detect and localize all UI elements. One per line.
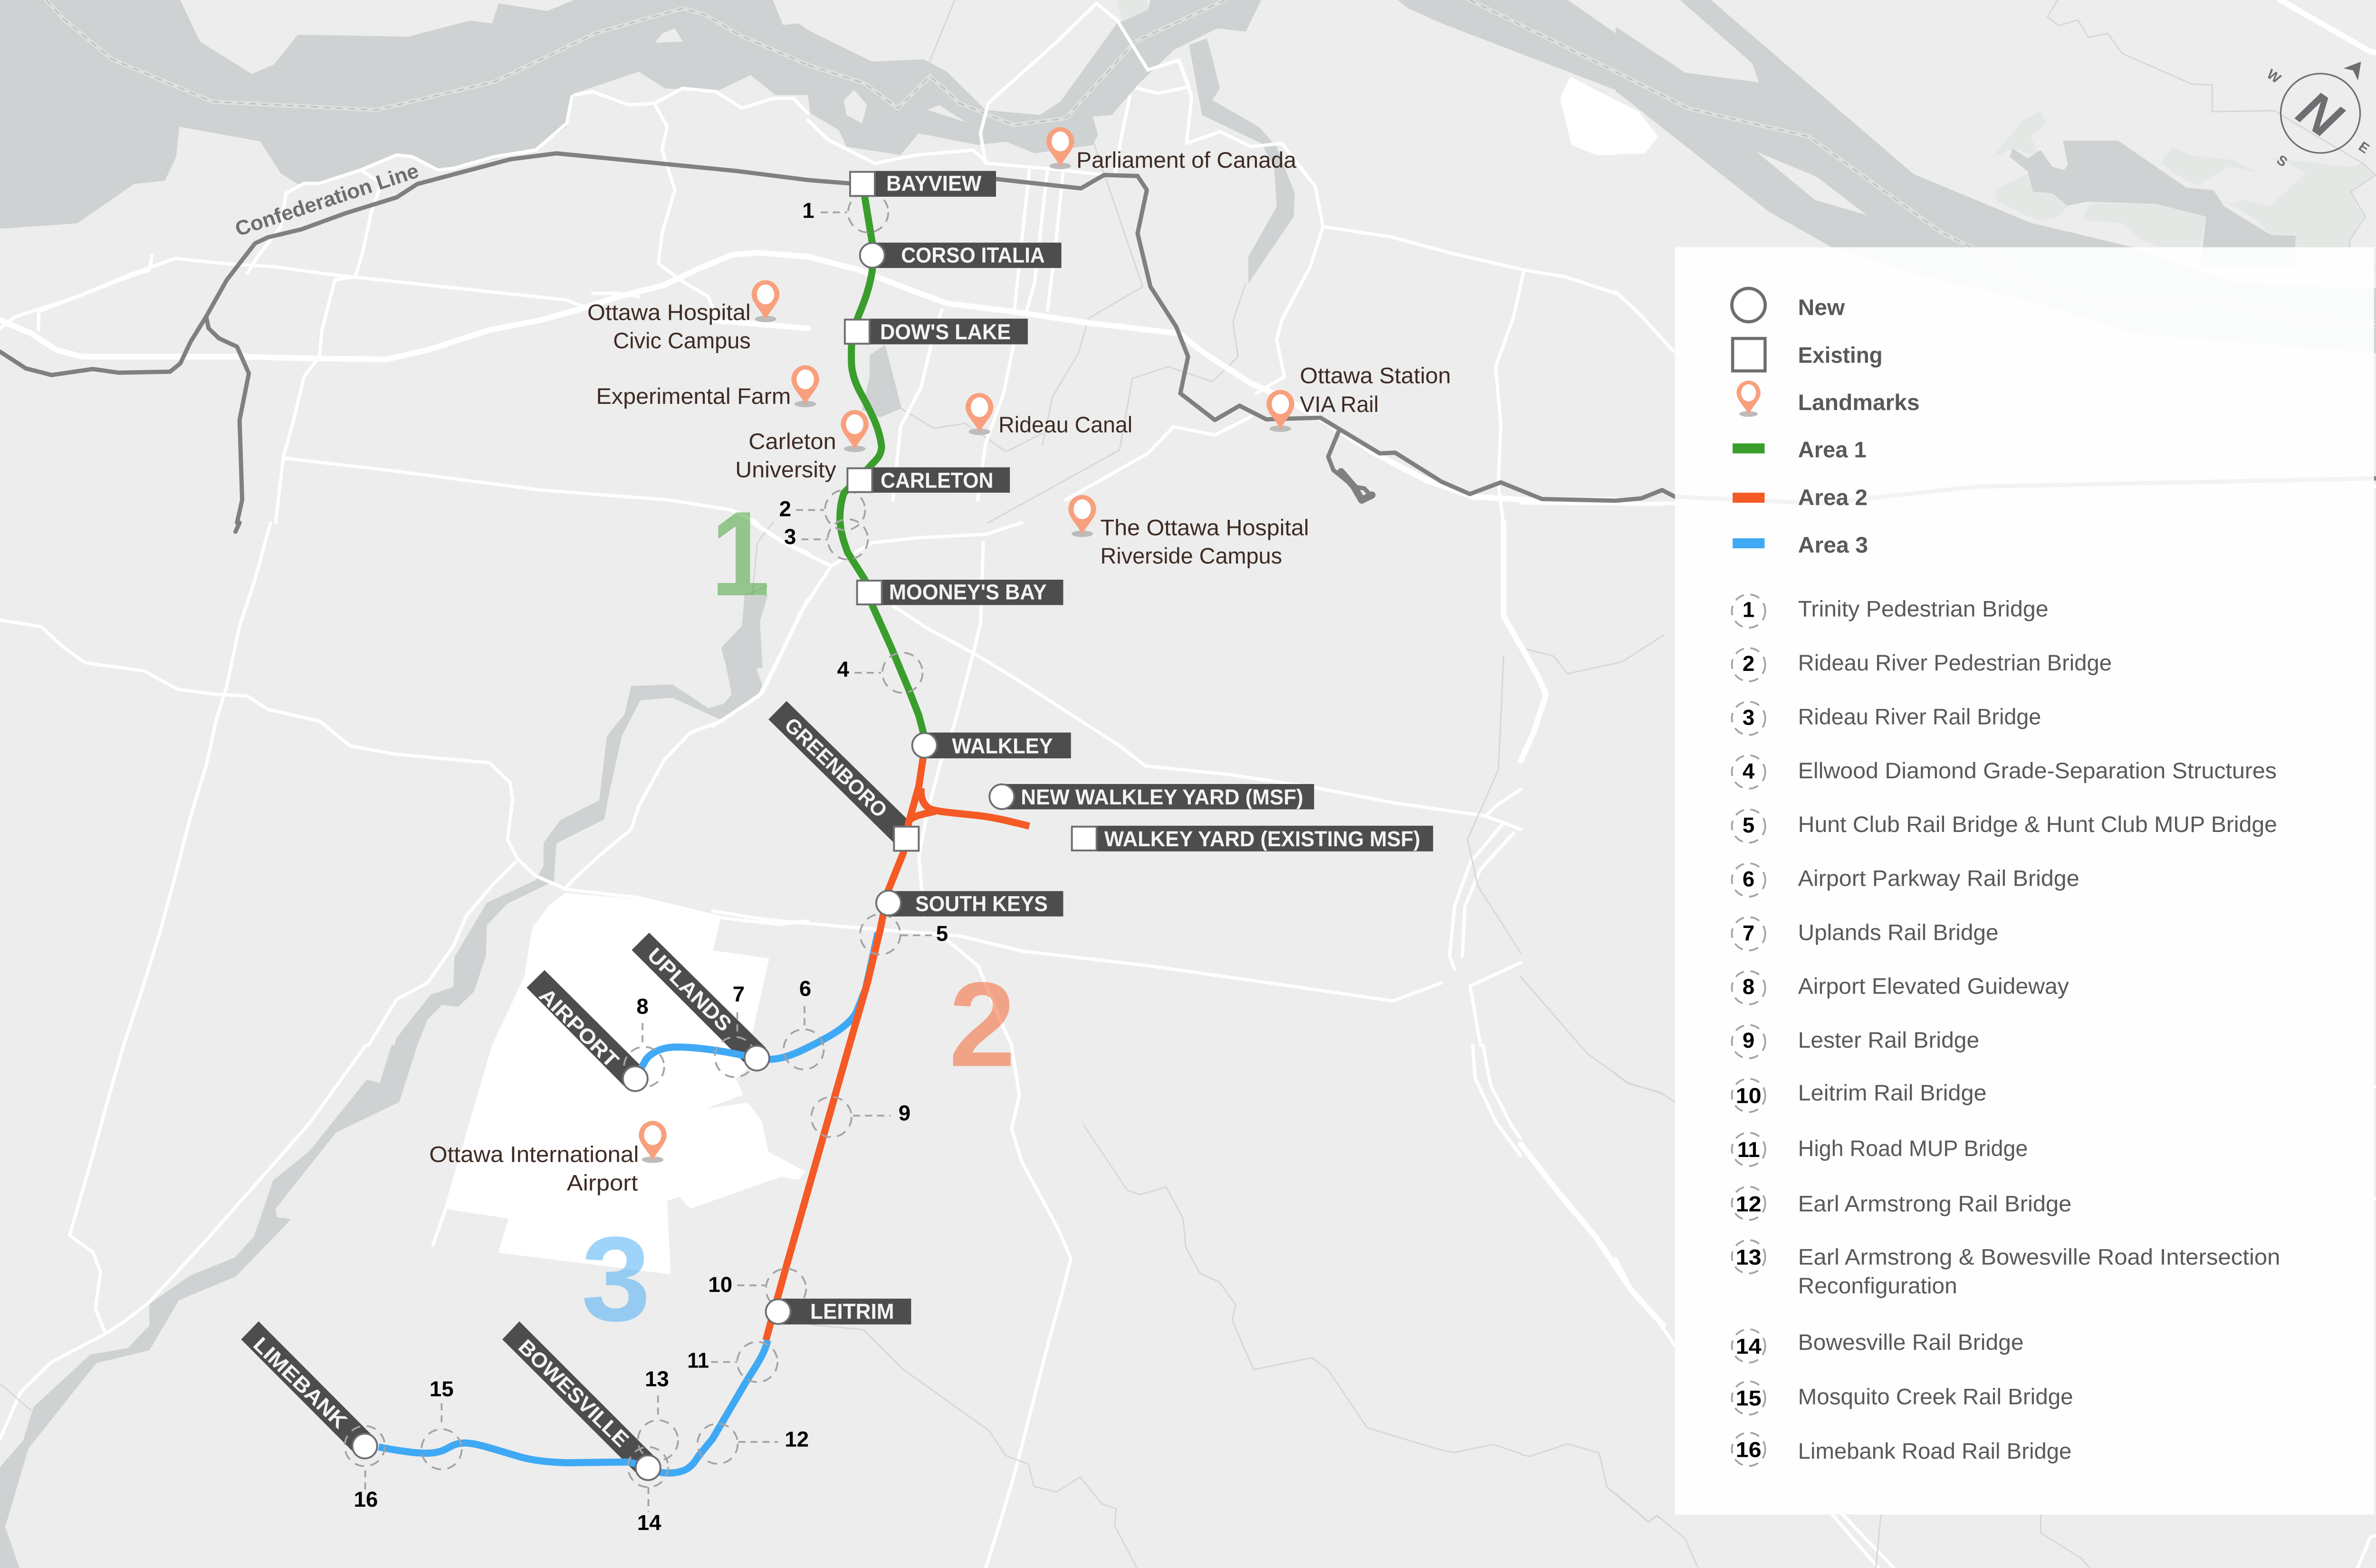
landmark: Ottawa Hospital Civic Campus: Civic Campus <box>613 328 751 354</box>
bridge 15: 15 <box>430 1377 454 1401</box>
bridge 7 <box>715 982 755 1077</box>
legend item 6: Airport Parkway Rail Bridge <box>1798 866 2079 891</box>
landmark: Ottawa Hospital Civic Campus <box>587 280 779 354</box>
legend item 16: Limebank Road Rail Bridge <box>1798 1439 2071 1464</box>
legend: area 3 <box>1733 533 1868 558</box>
bridge 10 <box>708 1269 806 1309</box>
landmark: Parliament of Canada: Parliament of Canada <box>1076 148 1297 173</box>
legend: new station: New <box>1798 295 1845 320</box>
legend item 15: 15 <box>1736 1386 1762 1410</box>
bridge 14 <box>628 1447 668 1535</box>
Confederation Line track <box>0 153 2376 532</box>
Area 2 line <box>766 758 923 1340</box>
landmark: Carleton University: University <box>735 458 836 483</box>
legend item 9: 9 <box>1743 1028 1754 1052</box>
legend item 7 <box>1732 917 1999 950</box>
legend item 8: 8 <box>1743 975 1754 999</box>
bridge 2 <box>779 490 865 530</box>
landmark: Ottawa International Airport: Ottawa International <box>429 1142 639 1167</box>
station: Leitrim <box>766 1299 911 1324</box>
bridge 3: 3 <box>784 525 796 549</box>
station marker: Bowesville <box>636 1455 661 1480</box>
landmark: Rideau Canal <box>966 393 1132 438</box>
landmark: The Ottawa Hospital Riverside Campus <box>1068 495 1309 569</box>
Area 3 line: south to Limebank <box>379 1340 768 1473</box>
legend item 7: Uplands Rail Bridge <box>1798 920 1999 946</box>
bridge 16: 16 <box>354 1487 378 1511</box>
bridge 5: 5 <box>936 921 948 946</box>
diagonal label band: Airport <box>527 970 644 1088</box>
bridge 12: 12 <box>785 1427 809 1451</box>
station: Walkey Yard: WALKEY YARD (EXISTING MSF) <box>1104 827 1420 851</box>
legend item 3: Rideau River Rail Bridge <box>1798 704 2041 729</box>
legend item 14 <box>1732 1329 2024 1363</box>
legend background <box>1675 247 2374 1514</box>
diagonal label band: Limebank <box>241 1321 374 1454</box>
diagonal label band: Limebank: LIMEBANK <box>249 1333 352 1434</box>
station marker: Uplands <box>745 1046 769 1071</box>
bridge 5 <box>860 914 948 955</box>
bridge 12 <box>698 1424 809 1464</box>
bridge 8: 8 <box>636 994 649 1019</box>
bridge 6: 6 <box>799 976 811 1001</box>
legend item 11: 11 <box>1737 1138 1760 1162</box>
legend: new station <box>1732 288 1845 322</box>
landmark: Carleton University <box>735 410 869 483</box>
legend item 12 <box>1732 1186 2071 1220</box>
legend item 5: 5 <box>1743 813 1754 837</box>
dashed bridge markers and number callouts <box>345 192 948 1535</box>
bridge 2: 2 <box>779 497 791 521</box>
bridge 4: 4 <box>837 657 850 681</box>
landmark: Ottawa Station VIA Rail: VIA Rail <box>1300 392 1379 417</box>
legend item 5 <box>1732 809 2277 843</box>
area number 3: 3 <box>581 1211 651 1346</box>
legend item 14: 14 <box>1736 1334 1762 1358</box>
legend item 8 <box>1732 971 2069 1004</box>
stations <box>353 171 1433 1480</box>
legend: area 3: Area 3 <box>1798 533 1868 558</box>
legend item 13: Reconfiguration <box>1798 1273 1957 1299</box>
compass: N <box>2287 79 2353 150</box>
station: South Keys: SOUTH KEYS <box>915 891 1048 916</box>
diagonal label band: Uplands: UPLANDS <box>643 944 736 1036</box>
landmark: Ottawa Hospital Civic Campus: Ottawa Hospital <box>587 300 751 325</box>
legend item 4 <box>1732 755 2277 789</box>
landmark: Ottawa Station VIA Rail: Ottawa Station <box>1300 363 1451 389</box>
area number 2: 2 <box>949 957 1016 1092</box>
station: Dow's Lake: DOW'S LAKE <box>880 320 1011 344</box>
diagonal label band: Bowesville: BOWESVILLE <box>514 1335 633 1452</box>
legend: area 2 <box>1733 485 1868 510</box>
station: Bayview: BAYVIEW <box>886 171 981 195</box>
landmark: Carleton University: Carleton <box>748 429 836 454</box>
bridge 7: 7 <box>733 982 745 1006</box>
station: Bayview <box>850 171 996 197</box>
bridge 13 <box>638 1367 678 1461</box>
station: Corso Italia: CORSO ITALIA <box>901 243 1045 267</box>
legend item 13: Earl Armstrong & Bowesville Road Intersection <box>1798 1245 2280 1270</box>
bridge 15 <box>422 1377 462 1469</box>
station: Greenboro marker <box>894 827 919 851</box>
landmark: Ottawa International Airport <box>429 1121 667 1196</box>
legend item 7: 7 <box>1743 921 1754 945</box>
legend: area 1: Area 1 <box>1798 438 1867 463</box>
landmark: Rideau Canal: Rideau Canal <box>998 412 1132 438</box>
landmark: The Ottawa Hospital Riverside Campus: Riverside Campus <box>1100 544 1282 569</box>
area number 1: 1 <box>711 486 770 621</box>
Area 1 line <box>840 196 924 736</box>
legend: existing station: Existing <box>1798 343 1883 368</box>
station: Walkley: WALKLEY <box>952 734 1053 758</box>
legend item 13: 13 <box>1736 1245 1762 1270</box>
legend: existing station <box>1733 338 1883 371</box>
legend item 10 <box>1732 1079 1986 1112</box>
legend item 8: Airport Elevated Guideway <box>1798 974 2069 999</box>
landmarks <box>429 127 1451 1196</box>
station: Mooney's Bay: MOONEY'S BAY <box>889 580 1047 604</box>
bridge 14: 14 <box>637 1511 661 1535</box>
bridge 9: 9 <box>899 1101 910 1125</box>
legend item 15 <box>1732 1381 2073 1415</box>
bridge 8 <box>624 994 664 1087</box>
legend item 4: 4 <box>1743 759 1755 783</box>
legend item 3 <box>1732 702 2041 735</box>
legend item 2: 2 <box>1743 651 1754 676</box>
label: Confederation Line: Confederation Line <box>232 160 422 241</box>
diagonal label band: Greenboro <box>768 701 912 842</box>
bridge 11: 11 <box>687 1348 709 1372</box>
bridge 4 <box>837 653 922 693</box>
legend item 10: Leitrim Rail Bridge <box>1798 1080 1986 1106</box>
landmark: Ottawa International Airport: Airport <box>567 1171 638 1196</box>
diagonal label band: Uplands <box>632 933 766 1066</box>
bridge 6 <box>784 976 824 1070</box>
Area 2 yard branch <box>909 788 1029 826</box>
legend item 3: 3 <box>1743 705 1754 729</box>
legend item 6: 6 <box>1743 867 1754 891</box>
legend item 4: Ellwood Diamond Grade-Separation Structures <box>1798 758 2277 784</box>
legend item 15: Mosquito Creek Rail Bridge <box>1798 1385 2073 1410</box>
legend item 13 <box>1732 1240 2280 1299</box>
bridge 16 <box>345 1426 385 1511</box>
legend item 6 <box>1732 863 2079 897</box>
station: Carleton: CARLETON <box>881 468 993 492</box>
legend item 11: High Road MUP Bridge <box>1798 1136 2028 1161</box>
legend item 14: Bowesville Rail Bridge <box>1798 1330 2024 1355</box>
panel: legend <box>1675 247 2374 1514</box>
legend: landmarks <box>1736 381 1920 417</box>
bridge 1 <box>802 192 888 232</box>
legend item 1 <box>1732 594 2049 628</box>
landmark: Experimental Farm: Experimental Farm <box>596 384 791 409</box>
bridge 1: 1 <box>802 199 814 223</box>
compass: W <box>2264 67 2283 86</box>
legend: area 1 <box>1733 438 1867 463</box>
legend item 16: 16 <box>1736 1437 1762 1462</box>
legend: landmarks: Landmarks <box>1798 390 1920 415</box>
legend item 12: Earl Armstrong Rail Bridge <box>1798 1191 2071 1216</box>
landmark: The Ottawa Hospital Riverside Campus: The Ottawa Hospital <box>1100 516 1309 541</box>
landmark: Parliament of Canada <box>1046 127 1297 173</box>
diagonal label band: Greenboro: GREENBORO <box>780 713 891 822</box>
legend item 2 <box>1732 648 2112 681</box>
legend item 9: Lester Rail Bridge <box>1798 1028 1979 1053</box>
station marker: Limebank <box>353 1434 377 1458</box>
bridge 3 <box>784 519 868 559</box>
Area 3 line: airport branch <box>635 933 878 1079</box>
legend item 2: Rideau River Pedestrian Bridge <box>1798 650 2112 676</box>
station: New Walkley Yard: NEW WALKLEY YARD (MSF) <box>1021 785 1303 809</box>
bridge 10: 10 <box>708 1272 732 1297</box>
landmark: Ottawa Station VIA Rail <box>1266 363 1451 432</box>
legend: area 2: Area 2 <box>1798 485 1868 510</box>
bridge 13: 13 <box>645 1367 669 1391</box>
bridge 9 <box>811 1097 910 1137</box>
station: Walkley <box>912 733 1071 758</box>
compass: E <box>2356 139 2372 157</box>
diagonal label band: Bowesville <box>502 1321 657 1476</box>
legend item 5: Hunt Club Rail Bridge & Hunt Club MUP Bridge <box>1798 812 2277 837</box>
bridge 11 <box>687 1342 777 1382</box>
legend item 9 <box>1732 1025 1979 1058</box>
legend item 10: 10 <box>1736 1083 1762 1108</box>
compass <box>2264 62 2372 170</box>
legend item 16 <box>1732 1433 2071 1466</box>
legend item 1: Trinity Pedestrian Bridge <box>1798 597 2049 622</box>
legend item 1: 1 <box>1743 597 1754 621</box>
station marker: Airport <box>623 1066 648 1091</box>
compass: S <box>2274 153 2290 170</box>
station: Leitrim: LEITRIM <box>810 1299 894 1323</box>
landmark: Experimental Farm <box>596 365 819 409</box>
legend item 12: 12 <box>1736 1192 1762 1216</box>
diagonal label band: Airport: AIRPORT <box>535 984 623 1072</box>
legend item 11 <box>1732 1133 2028 1166</box>
